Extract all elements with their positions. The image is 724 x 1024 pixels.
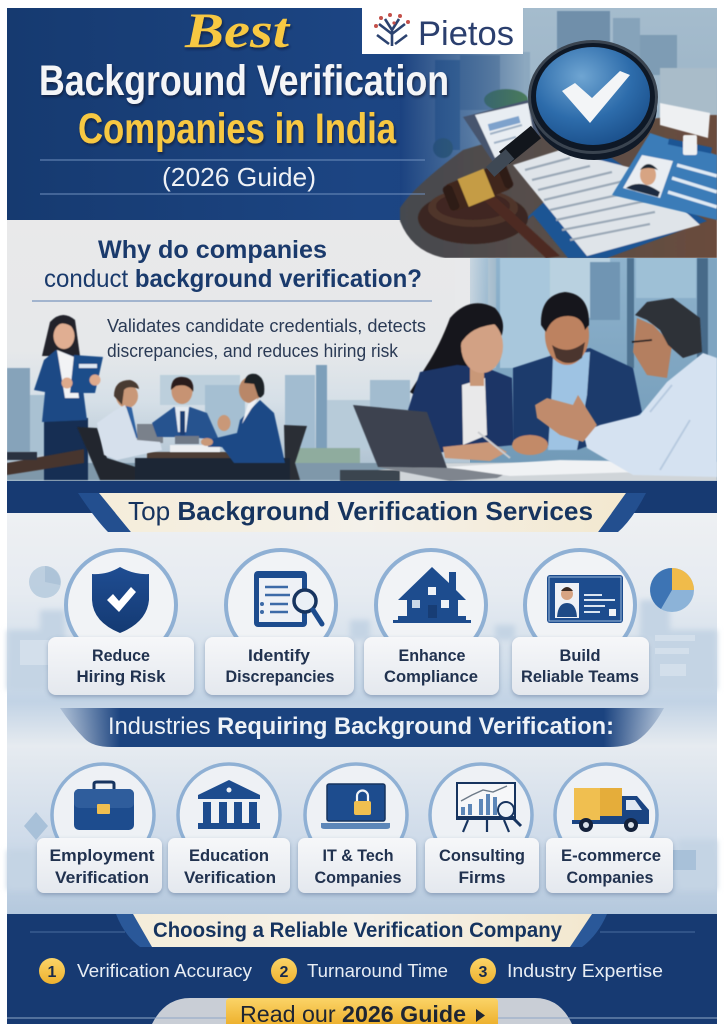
icon: document with magnifier: [254, 571, 322, 627]
icon: house: [393, 567, 471, 623]
industry: E-commerce Companies: Companies: [566, 868, 654, 887]
icon: ID badge: [547, 575, 623, 623]
band: services heading: Top Background Verification Services: [128, 496, 593, 526]
industry: Consulting Firms: Consulting: [439, 846, 525, 865]
service: Enhance Compliance: [364, 550, 499, 695]
text block: reasons: [107, 316, 426, 361]
title: Best: Best: [184, 2, 291, 58]
industry: Consulting Firms: [425, 764, 539, 893]
icon: shield: [92, 567, 149, 633]
icon: faded pie left: [29, 566, 61, 598]
icon: bank building: [198, 780, 260, 829]
text block: reasons: Validates candidate credentials, detects: [107, 316, 426, 336]
industry: E-commerce Companies: [546, 764, 673, 893]
service: Enhance Compliance: Compliance: [384, 667, 478, 686]
band: services heading: [7, 481, 717, 532]
criterion 2: 2: [280, 964, 289, 981]
criterion 2: [271, 958, 448, 984]
icon: magnifying glass with check: [490, 40, 658, 172]
criterion 3: 3: [479, 964, 488, 981]
service: Build Reliable Teams: Reliable Teams: [521, 667, 639, 686]
industry: Consulting Firms: Firms: [458, 868, 506, 887]
industry: IT and Tech Companies: IT & Tech: [322, 846, 394, 865]
service: Enhance Compliance: Enhance: [398, 646, 466, 665]
criterion 1: Verification Accuracy: [77, 961, 252, 981]
icon: pie chart right: [650, 568, 694, 612]
icon: delivery truck: [572, 788, 649, 832]
heading: why do companies conduct background verification: [32, 236, 432, 301]
photo: man in blazer: [512, 292, 642, 455]
photo: table and laptop: [340, 462, 717, 481]
panel: why companies conduct verification: [7, 220, 717, 481]
service: Identify Discrepancies: [205, 550, 354, 695]
industry: Employment Verification: [37, 764, 162, 893]
service: Reduce Hiring Risk: Hiring Risk: [76, 667, 166, 686]
photo: laptop: [353, 405, 640, 481]
illustration: seated colleagues: [97, 374, 285, 463]
left desk, chairs and table: [7, 425, 307, 480]
service: Identify Discrepancies: Identify: [248, 646, 311, 665]
document: folder and report sheets: [463, 100, 707, 258]
heading: why do companies conduct background verification: conduct background verification?: [44, 265, 422, 293]
panel: header: [7, 2, 717, 258]
text block: reasons: discrepancies, and reduces hiring risk: [107, 341, 399, 361]
criterion 3: Industry Expertise: [507, 961, 663, 981]
criterion 3: [470, 958, 663, 984]
criterion 2: Turnaround Time: [307, 961, 448, 981]
logo: Pietos: [362, 8, 523, 54]
industry: Education Verification: Education: [189, 846, 269, 865]
criterion 1: [39, 958, 252, 984]
office skyline photo backdrop: [7, 258, 717, 481]
heading: why do companies conduct background verification: Why do companies: [98, 236, 327, 264]
industry: IT and Tech Companies: Companies: [314, 868, 402, 887]
industry: Employment Verification: Employment: [50, 846, 155, 865]
logo: Pietos: Pietos: [418, 15, 514, 53]
panel: services and industries background: [7, 513, 717, 915]
photo: man in light blue shirt: [535, 298, 717, 477]
industry: E-commerce Companies: E-commerce: [561, 846, 661, 865]
title: Companies in India: Companies in India: [78, 105, 397, 153]
industry: Education Verification: Verification: [184, 868, 276, 887]
title: Background Verification: Background Verification: [39, 57, 449, 105]
icon: presentation chart: [456, 783, 521, 832]
skyline photo backdrop: [400, 8, 717, 220]
icon: gavel: [418, 160, 560, 258]
industry: Education Verification: [168, 764, 290, 893]
faded chart bars: [20, 635, 696, 870]
subtitle: 2026 Guide: (2026 Guide): [162, 162, 316, 192]
service: Build Reliable Teams: [512, 550, 649, 695]
service: Identify Discrepancies: Discrepancies: [226, 667, 334, 686]
illustration: standing woman with clipboard: [34, 315, 103, 480]
band: industries heading: [60, 708, 664, 747]
band: industries heading: Industries Requiring Background Verification:: [108, 713, 614, 740]
service: Reduce Hiring Risk: Reduce: [92, 646, 150, 665]
criterion 1: 1: [48, 964, 57, 981]
desk surface: [400, 115, 717, 258]
footer arc: [152, 998, 572, 1024]
panel: choosing a reliable company: [7, 914, 717, 1024]
service: Reduce Hiring Risk: [48, 550, 194, 695]
left skyline buildings: [7, 368, 30, 452]
industry: Employment Verification: Verification: [55, 868, 149, 887]
icon: briefcase: [74, 782, 134, 830]
photo: woman at table: [408, 303, 514, 461]
icon: laptop with padlock: [321, 784, 390, 829]
service: Build Reliable Teams: Build: [560, 646, 600, 665]
ribbon heading: [116, 914, 607, 947]
industry: IT and Tech Companies: [298, 764, 416, 893]
icon: ID card with portrait: [612, 103, 717, 220]
ribbon heading: Choosing a Reliable Verification Company: [153, 918, 562, 942]
icon: logo tree: [374, 13, 410, 46]
